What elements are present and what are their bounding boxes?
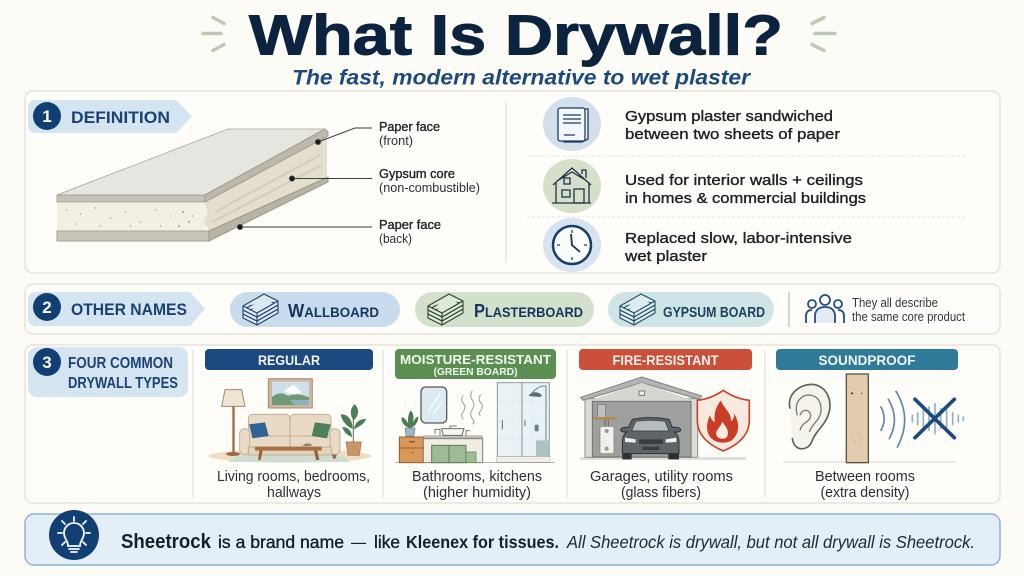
- panel: definition: [25, 91, 1000, 273]
- title: What Is Drywall?: [249, 4, 783, 68]
- pill: plasterboard: PLASTERBOARD: [474, 301, 583, 321]
- pill: wallboard: WALLBOARD: [288, 301, 379, 321]
- text: gypsum sandwich: Gypsum plaster sandwiched: [625, 108, 833, 125]
- subtitle: The fast, modern alternative to wet plaster: [292, 66, 752, 90]
- header: soundproof: SOUNDPROOF: [818, 353, 916, 368]
- caption: soundproof: Between rooms: [815, 469, 915, 485]
- diagram labels: (front): [379, 134, 413, 148]
- text: gypsum sandwich: [625, 108, 840, 143]
- illustration: living room: [208, 379, 372, 463]
- pill: plasterboard: [415, 292, 594, 327]
- text: same product: They all describe: [852, 296, 938, 310]
- illustration: bathroom: [395, 383, 555, 463]
- text: same product: [852, 296, 965, 324]
- diagram labels: Gypsum core: [379, 167, 455, 181]
- text: replaced wet plaster: wet plaster: [624, 248, 707, 265]
- section tag: other names: OTHER NAMES: [71, 301, 187, 319]
- caption: moisture-resistant: [412, 469, 542, 501]
- header: moisture-resistant: (GREEN BOARD): [434, 367, 518, 378]
- header: moisture-resistant: [395, 349, 556, 379]
- diagram labels: (back): [379, 232, 412, 246]
- icon: left title accent: [203, 18, 224, 50]
- header: regular: [205, 349, 373, 370]
- text: replaced wet plaster: Replaced slow, labor-intensive: [625, 230, 852, 247]
- section tag: other names: 2: [42, 298, 52, 317]
- caption: soundproof: (extra density): [820, 485, 910, 501]
- callout text: is a brand name: [218, 532, 344, 552]
- column: soundproof: [776, 349, 963, 501]
- section tag: definition: 1: [42, 107, 52, 126]
- header: moisture-resistant: MOISTURE-RESISTANT: [400, 352, 551, 367]
- column: moisture-resistant: [395, 349, 556, 501]
- callout: sheetrock: [25, 510, 1000, 565]
- section tag: types: FOUR COMMON: [68, 355, 173, 372]
- section tag: other names: [28, 292, 205, 326]
- panel: four common types: [25, 345, 1000, 503]
- pill: gypsum board: GYPSUM BOARD: [663, 305, 765, 321]
- section tag: types: DRYWALL TYPES: [68, 375, 178, 392]
- panel: other names: [25, 284, 1000, 334]
- caption: moisture-resistant: (higher humidity): [423, 485, 531, 501]
- section tag: types: 3: [42, 353, 52, 372]
- illustration: garage and fire shield: [580, 377, 749, 460]
- callout text: Kleenex for tissues.: [406, 532, 559, 552]
- callout text: —: [351, 532, 366, 552]
- caption: fire-resistant: [590, 469, 733, 501]
- icon: house: [543, 159, 601, 213]
- section tag: definition: DEFINITION: [71, 108, 170, 127]
- header: soundproof: [776, 349, 958, 370]
- diagram labels: Paper face: [379, 218, 441, 232]
- icon: right title accent: [812, 18, 835, 50]
- caption: moisture-resistant: Bathrooms, kitchens: [412, 469, 542, 485]
- text: replaced wet plaster: [624, 230, 852, 265]
- caption: regular: hallways: [267, 485, 321, 501]
- icon: lightbulb: [49, 510, 99, 560]
- drywall cross-section diagram: [57, 129, 328, 241]
- caption: regular: [217, 469, 370, 501]
- callout text: [121, 531, 975, 553]
- icon: paper sheets: [543, 97, 601, 151]
- illustration: ear, wall and blocked sound: [783, 374, 963, 463]
- header: regular: REGULAR: [258, 353, 320, 368]
- text: same product: the same core product: [852, 310, 965, 324]
- text: gypsum sandwich: between two sheets of paper: [625, 126, 840, 143]
- icon: clock: [543, 218, 601, 272]
- caption: fire-resistant: (glass fibers): [621, 485, 701, 501]
- callout text: All Sheetrock is drywall, but not all drywall is Sheetrock.: [566, 532, 975, 552]
- callout text: like: [374, 532, 400, 552]
- text: interior uses: in homes & commercial buildings: [625, 190, 866, 207]
- icon: people: [806, 295, 844, 323]
- pill: wallboard: [230, 292, 400, 327]
- section tag: definition: [28, 100, 192, 133]
- diagram labels: Paper face: [379, 120, 440, 134]
- pill: gypsum board: [608, 292, 774, 327]
- text: interior uses: [625, 172, 866, 207]
- caption: fire-resistant: Garages, utility rooms: [590, 469, 733, 485]
- caption: soundproof: [815, 469, 915, 501]
- header: fire-resistant: FIRE-RESISTANT: [612, 353, 719, 368]
- column: fire-resistant: [579, 349, 752, 501]
- header: fire-resistant: [579, 349, 752, 370]
- section tag: types: [28, 347, 188, 397]
- text: interior uses: Used for interior walls + ceilings: [625, 172, 863, 189]
- diagram labels: [379, 120, 480, 246]
- leader lines: [238, 128, 372, 230]
- callout text: Sheetrock: [121, 531, 212, 553]
- column: regular: [205, 349, 373, 501]
- diagram labels: (non-combustible): [379, 181, 480, 195]
- caption: regular: Living rooms, bedrooms,: [217, 469, 370, 485]
